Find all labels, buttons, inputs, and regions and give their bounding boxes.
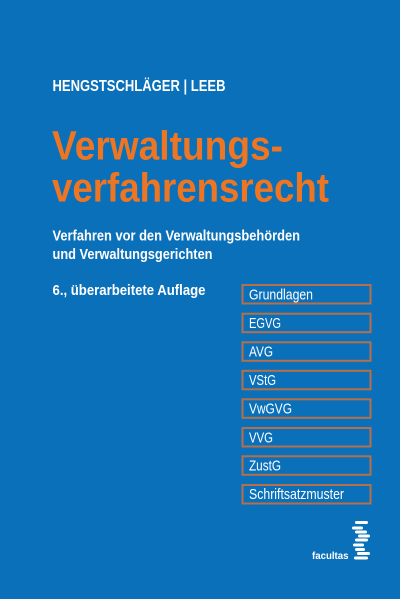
icon: publisher logo xyxy=(352,521,370,560)
title xyxy=(52,122,329,210)
item: ZustG: ZustG xyxy=(249,459,281,475)
subtitle xyxy=(52,228,300,263)
contents list xyxy=(242,285,370,504)
item: AVG: AVG xyxy=(249,344,273,360)
item: Schriftsatzmuster: Schriftsatzmuster xyxy=(249,487,344,503)
item: AVG xyxy=(242,342,370,361)
title: Verwaltungs- xyxy=(52,122,283,168)
item: VStG xyxy=(242,371,370,389)
item: ZustG xyxy=(242,456,370,475)
title: verfahrensrecht xyxy=(52,164,329,210)
item: Grundlagen xyxy=(242,285,370,304)
subtitle: und Verwaltungsgerichten xyxy=(52,246,212,263)
item: EGVG xyxy=(242,314,370,332)
edition note: 6., überarbeitete Auflage xyxy=(52,282,206,299)
subtitle: Verfahren vor den Verwaltungsbehörden xyxy=(52,228,300,244)
item: VwGVG: VwGVG xyxy=(249,402,292,418)
item: Grundlagen: Grundlagen xyxy=(249,287,313,303)
item: EGVG: EGVG xyxy=(249,316,281,332)
item: VStG: VStG xyxy=(249,373,276,389)
publisher name: facultas xyxy=(312,550,349,562)
item: VVG: VVG xyxy=(249,430,273,446)
authors heading: HENGSTSCHLÄGER | LEEB xyxy=(52,78,226,95)
item: VwGVG xyxy=(242,399,370,418)
item: VVG xyxy=(242,428,370,446)
